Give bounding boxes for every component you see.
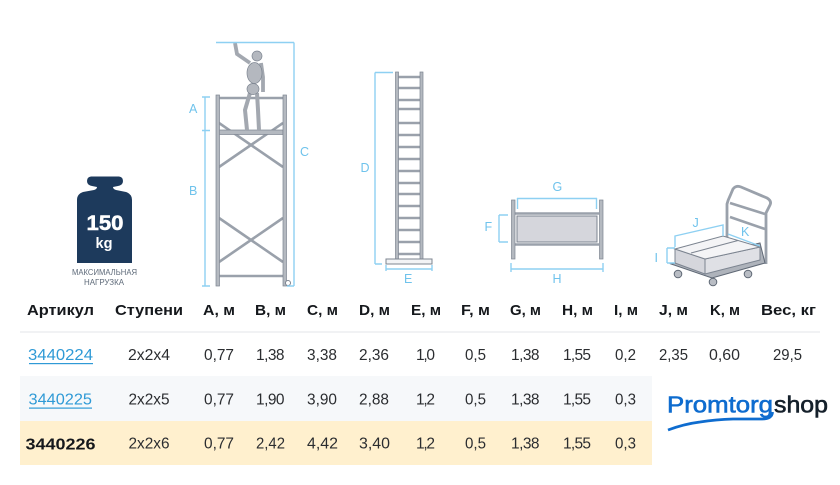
table header: A, м (203, 302, 235, 319)
icon: weight 150 kg: 150 (86, 211, 124, 235)
table row: 3440226: 0,5 (465, 436, 486, 452)
logo: Promtorgshop: shop (774, 392, 828, 418)
table row: 3440226: 2,42 (256, 436, 285, 452)
table row: 3440224: 0,2 (615, 347, 636, 364)
table row: 3440226: 1,38 (511, 436, 540, 452)
table header: Вес, кг (761, 302, 816, 319)
table row: 3440225: 1,2 (416, 392, 435, 408)
table row: 3440225: 1,55 (563, 392, 591, 408)
diagram: platform (484, 180, 603, 286)
row background: 3440226 (20, 421, 652, 465)
diagram: ladder (360, 72, 432, 286)
table row: 3440224: 1,38 (511, 347, 540, 364)
table row: 3440224: 3,38 (307, 347, 337, 364)
diagram: cart with box: K (741, 225, 750, 239)
table row: 3440224: 2,36 (359, 347, 389, 364)
diagram: scaffold tower with worker (189, 42, 309, 286)
diagram: scaffold tower with worker: A (189, 102, 198, 116)
table row: 3440225: 1,38 (511, 392, 540, 408)
table row: 3440226: 1,55 (563, 436, 591, 452)
table header: J, м (659, 302, 688, 319)
table header: F, м (461, 302, 490, 319)
diagram: ladder: D (360, 161, 370, 175)
table row: 3440224: 0,77 (204, 347, 234, 364)
table row: 3440226: 0,3 (615, 436, 636, 452)
table header: K, м (710, 302, 740, 319)
table row: 3440224: 2,35 (659, 347, 688, 364)
logo: Promtorgshop (667, 392, 828, 430)
icon: weight 150 kg: НАГРУЗКА (84, 278, 125, 287)
table row: 3440225: 2,88 (359, 392, 389, 408)
table row: 3440225: 1,90 (256, 392, 285, 408)
table row: 3440225: 2x2x5 (128, 392, 170, 408)
table row: 3440224: 2x2x4 (128, 347, 170, 364)
table header: E, м (411, 302, 441, 319)
table row: 3440224: 1,0 (416, 347, 435, 364)
table header: H, м (562, 302, 593, 319)
table row: 3440225: 3440225 (28, 392, 92, 408)
icon: weight 150 kg: kg (96, 236, 112, 252)
table row: 3440226: 3440226 (26, 436, 96, 454)
table header: I, м (614, 302, 638, 319)
table row: 3440224: 1,38 (256, 347, 284, 364)
table row: 3440226 (26, 436, 636, 454)
table row: 3440226: 3,40 (359, 436, 390, 452)
table row: 3440224: 1,55 (563, 347, 591, 364)
diagram: ladder: E (404, 272, 412, 286)
table row: 3440224: 0,5 (465, 347, 486, 364)
table header: C, м (307, 302, 338, 319)
table header (20, 302, 820, 333)
table header: G, м (510, 302, 541, 319)
table (20, 302, 820, 465)
table header: B, м (255, 302, 286, 319)
table row: 3440225: 0,77 (204, 392, 234, 408)
table row: 3440224: 29,5 (773, 347, 802, 364)
table header: Артикул (27, 302, 94, 319)
table row: 3440225: 3,90 (307, 392, 337, 408)
table header: Ступени (115, 302, 183, 319)
table row: 3440224: 3440224 (28, 347, 93, 364)
logo: Promtorgshop: Promtorg (667, 392, 773, 418)
table row: 3440224: 0,60 (709, 347, 740, 364)
table row: 3440224 (28, 347, 802, 364)
table row: 3440225: 0,5 (465, 392, 486, 408)
diagram: cart with box: J (692, 216, 699, 230)
table row: 3440226: 4,42 (307, 436, 338, 452)
table row: 3440226: 0,77 (204, 436, 234, 452)
icon: weight 150 kg: МАКСИМАЛЬНАЯ (72, 268, 137, 277)
diagram: cart with box: I (654, 251, 658, 265)
table header: D, м (359, 302, 390, 319)
table row: 3440226: 1,2 (416, 436, 435, 452)
table row: 3440226: 2x2x6 (128, 436, 170, 452)
diagram: scaffold tower with worker: B (189, 184, 197, 198)
diagram: platform: G (552, 180, 562, 194)
diagram: platform: H (552, 272, 562, 286)
diagram: cart with box (654, 186, 771, 286)
diagram: platform: F (484, 220, 492, 234)
icon: weight 150 kg (72, 176, 137, 287)
table row: 3440225 (28, 392, 636, 409)
row background: 3440225 (20, 376, 652, 421)
diagram: scaffold tower with worker: C (300, 145, 309, 159)
table row: 3440225: 0,3 (615, 392, 636, 408)
